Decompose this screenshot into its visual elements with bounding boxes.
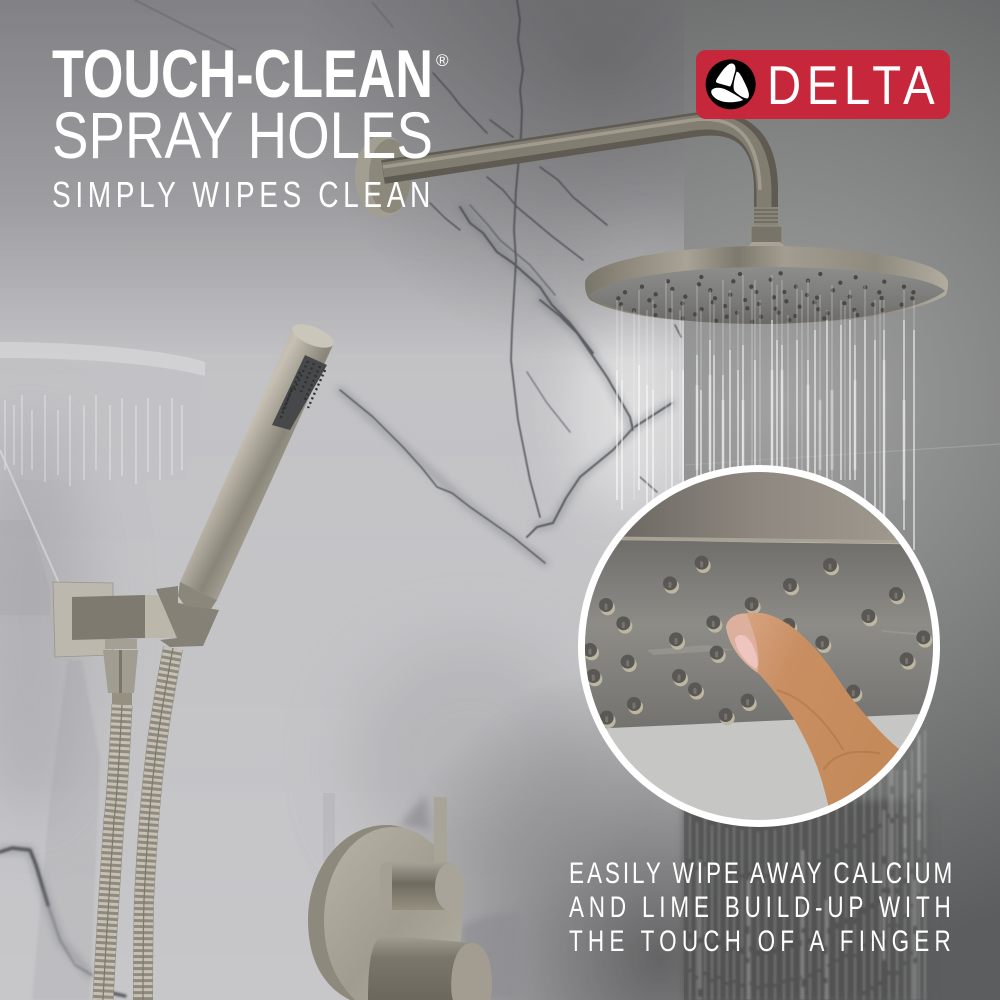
arm tube bbox=[383, 119, 766, 232]
callout white ring bbox=[578, 465, 940, 827]
ghost reflection of shower bbox=[0, 342, 205, 615]
marble veins bbox=[0, 0, 681, 1000]
wall seam bbox=[685, 444, 1000, 465]
bracket block front bbox=[72, 595, 145, 640]
right hose bbox=[143, 648, 173, 1000]
tagline: simply wipes clean: SIMPLY WIPES CLEAN bbox=[52, 175, 430, 215]
bracket block side bbox=[145, 595, 177, 638]
caption text: THE TOUCH OF A FINGER bbox=[569, 924, 951, 958]
valve plate rim bbox=[308, 825, 440, 1000]
right wall bbox=[684, 0, 1000, 1000]
water streams bbox=[617, 275, 914, 550]
mottled vein near valve bbox=[400, 795, 520, 1000]
hand shower on wall bracket bbox=[53, 319, 337, 1000]
valve trim and handles bbox=[308, 797, 492, 1000]
handle neck bbox=[178, 582, 217, 609]
ghost hose reflections bbox=[32, 660, 335, 1000]
left hose bbox=[103, 705, 122, 1000]
spray hole dimples bbox=[590, 563, 925, 721]
diverter end bbox=[435, 863, 465, 911]
diverter collar bbox=[380, 862, 400, 908]
caption text: EASILY WIPE AWAY CALCIUM bbox=[569, 856, 952, 890]
logo circle bbox=[706, 59, 756, 109]
diverter cylinder bbox=[392, 862, 450, 910]
callout: magnified spray holes with finger bbox=[578, 465, 940, 827]
lower handle end bbox=[451, 943, 492, 1000]
wall plate bbox=[53, 582, 113, 657]
wall flange bbox=[355, 135, 411, 217]
valve plate face bbox=[324, 827, 462, 1000]
holder wedge bbox=[156, 586, 219, 647]
subtitle: spray holes: SPRAY HOLES bbox=[52, 98, 433, 172]
registered mark: ® bbox=[436, 51, 449, 70]
delta logo badge bbox=[696, 50, 950, 119]
lower handle cylinder bbox=[368, 935, 473, 1000]
hose connector bbox=[103, 639, 138, 705]
rain shower head bbox=[585, 246, 948, 324]
caption text bbox=[569, 856, 952, 958]
thread and collar bbox=[748, 207, 786, 247]
finger bbox=[726, 613, 900, 806]
falling water band lower wall bbox=[684, 730, 935, 1000]
shower arm bbox=[355, 119, 786, 247]
spray face bbox=[272, 355, 327, 430]
delta wordmark: DELTA bbox=[767, 55, 935, 116]
handle end cap bbox=[289, 319, 337, 353]
title: touch-clean: TOUCH-CLEAN bbox=[52, 36, 433, 112]
handle body bbox=[180, 328, 333, 600]
spray nozzles bbox=[618, 273, 913, 322]
caption text: AND LIME BUILD-UP WITH bbox=[569, 890, 951, 924]
upper lever stem bbox=[434, 797, 447, 863]
